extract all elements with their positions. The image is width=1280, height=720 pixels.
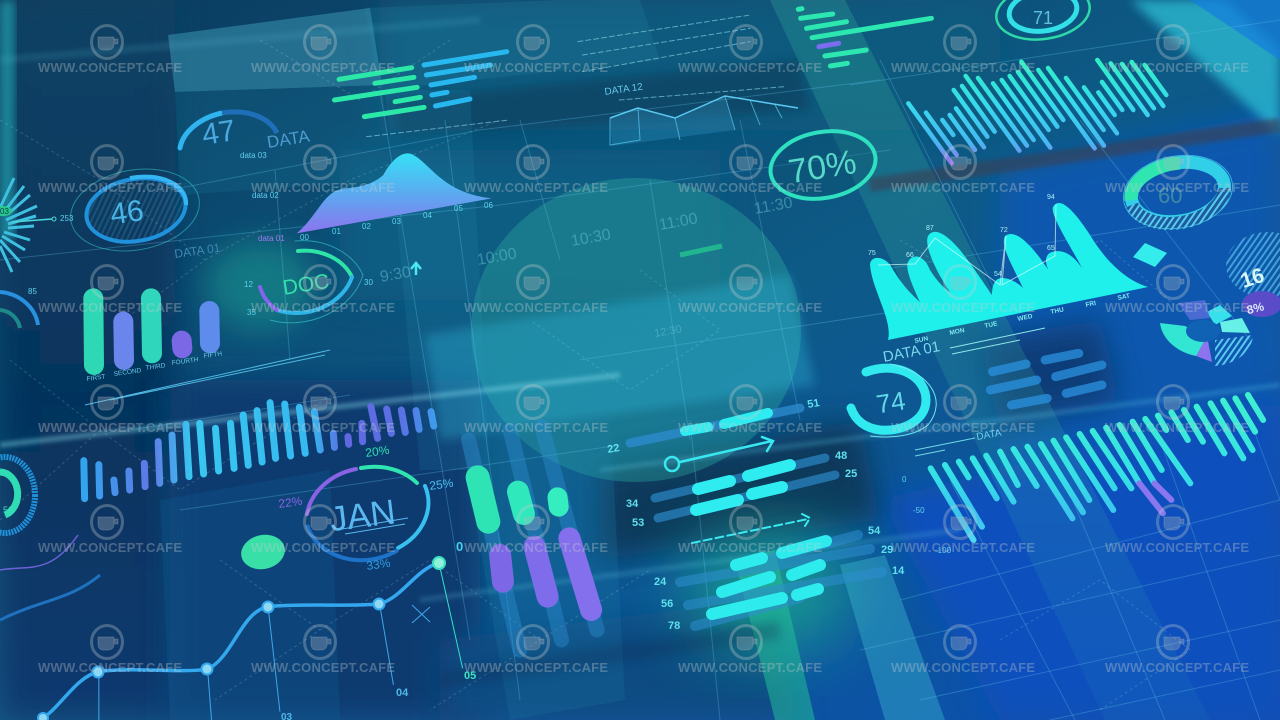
- band: top right bright: [1130, 0, 1280, 135]
- time labels: [379, 194, 794, 340]
- area chart: weekly cyan peaks: 65: [1047, 245, 1055, 252]
- circle: central: [471, 178, 801, 482]
- weekday labels: THU: [1050, 306, 1065, 316]
- bars: blue rows: [424, 52, 507, 106]
- tracks: [469, 427, 597, 650]
- time labels: 10:30: [570, 226, 612, 250]
- line chart: DATA 12: DATA 12: [604, 82, 644, 98]
- watermark: WWW.CONCEPT.CAFE: [464, 300, 608, 315]
- line chart: bottom left: 04: [396, 687, 409, 699]
- time labels: 9:30: [379, 264, 412, 286]
- watermark: WWW.CONCEPT.CAFE: [1105, 420, 1249, 435]
- watermark: WWW.CONCEPT.CAFE: [251, 540, 395, 555]
- bar labels: FOURTH: [171, 356, 199, 367]
- area chart: center left: 01: [332, 227, 341, 236]
- progress rows: group three: 29: [881, 544, 893, 556]
- watermark: WWW.CONCEPT.CAFE: [38, 300, 182, 315]
- progress rows: group three: 56: [661, 598, 673, 610]
- progress rows: group three: 54: [868, 525, 881, 537]
- area chart: weekly cyan peaks: 54: [994, 271, 1002, 278]
- watermark: WWW.CONCEPT.CAFE: [38, 180, 182, 195]
- line chart: bottom left: 05: [464, 670, 476, 682]
- area chart: center left: 03: [392, 217, 401, 226]
- watermark: WWW.CONCEPT.CAFE: [678, 180, 822, 195]
- radial gauge: 03: [0, 207, 9, 216]
- area chart: center left: data 01: [258, 234, 285, 243]
- lower right waveform: -100: [935, 546, 952, 555]
- ring: JAN: JAN: [327, 492, 398, 539]
- watermark: WWW.CONCEPT.CAFE: [891, 300, 1035, 315]
- area chart: center left: 04: [423, 211, 432, 220]
- bar: purple tails: [1139, 483, 1171, 513]
- radial gauge: [0, 178, 74, 272]
- streak: low left: [440, 630, 780, 680]
- ring: 70%: 70%: [786, 143, 859, 191]
- watermark: WWW.CONCEPT.CAFE: [678, 300, 822, 315]
- time labels: 11:30: [753, 194, 794, 218]
- ring: DOC: 12: [244, 280, 253, 289]
- bars: green rows: [334, 68, 424, 117]
- ring: JAN: 25%: [428, 476, 455, 493]
- watermark: WWW.CONCEPT.CAFE: [251, 420, 395, 435]
- area chart: weekly cyan peaks: 94: [1047, 194, 1055, 201]
- left blue trace: [0, 575, 100, 620]
- area chart: center left: 06: [484, 201, 493, 210]
- watermark: WWW.CONCEPT.CAFE: [38, 540, 182, 555]
- area chart: weekly cyan peaks: [868, 194, 1148, 366]
- ring: 60: 60: [1158, 183, 1182, 208]
- icon: up arrow: [411, 263, 421, 275]
- gauge: lower left: 85: [28, 287, 37, 296]
- band: lower green: [735, 550, 815, 720]
- watermark: WWW.CONCEPT.CAFE: [38, 420, 182, 435]
- watermark: WWW.CONCEPT.CAFE: [1105, 660, 1249, 675]
- progress rows: group two: 48: [835, 450, 847, 462]
- top right waveform: [908, 60, 1166, 163]
- progress rows: group one: 22: [606, 442, 621, 456]
- dashed guides: [367, 15, 785, 137]
- progress rows: group three: 24: [654, 576, 667, 588]
- gauge: lower left: [0, 287, 38, 328]
- watermark: WWW.CONCEPT.CAFE: [464, 660, 608, 675]
- progress rows: group two: 53: [632, 517, 644, 529]
- watermark: WWW.CONCEPT.CAFE: [891, 60, 1035, 75]
- bar labels: FIRST: [86, 373, 106, 383]
- watermark: WWW.CONCEPT.CAFE: [464, 420, 608, 435]
- left bar chart: DATA 01: [173, 241, 222, 261]
- bar labels: [86, 350, 223, 383]
- area chart: weekly cyan peaks: 87: [926, 225, 934, 232]
- weekday labels: SUN: [914, 335, 929, 345]
- progress rows: group three: 14: [892, 565, 905, 577]
- striped gauge: 16: [1238, 264, 1267, 293]
- ring: 47: DATA: [266, 126, 312, 152]
- weekday labels: MON: [949, 327, 966, 337]
- area chart: weekly cyan peaks: DATA 01: [882, 338, 942, 366]
- ring: DOC: [244, 241, 373, 323]
- weekday labels: FRI: [1085, 300, 1097, 309]
- watermark: WWW.CONCEPT.CAFE: [251, 60, 395, 75]
- bar labels: SECOND: [113, 367, 142, 378]
- area chart: weekly cyan peaks: 66: [906, 252, 914, 259]
- panel: upper center block: [365, 0, 660, 90]
- top horizontal bars: [334, 15, 785, 137]
- area chart: center left: 05: [454, 204, 463, 213]
- band: green diagonal: [770, 0, 1210, 720]
- left waveform: [84, 403, 434, 499]
- ring: JAN: 22%: [277, 494, 304, 511]
- progress rows: group two: 34: [626, 498, 639, 510]
- left line traces: [0, 535, 78, 570]
- radial gauge: 253: [60, 214, 74, 223]
- area chart: center left: 02: [362, 222, 371, 231]
- arrow: dashed: [692, 514, 810, 543]
- ring: JAN: 33%: [365, 556, 392, 573]
- watermark: WWW.CONCEPT.CAFE: [678, 660, 822, 675]
- watermark: WWW.CONCEPT.CAFE: [1105, 60, 1249, 75]
- streak: left bright: [0, 375, 620, 445]
- progress rows: group two: 25: [845, 468, 857, 480]
- purple bars: [500, 555, 503, 582]
- green dot: [238, 531, 288, 573]
- ring: DOC: 30: [364, 278, 373, 287]
- purple badge: 8%: [1245, 299, 1266, 317]
- area chart: center left: data 02: [252, 191, 279, 200]
- panel: lower left dark column: [160, 470, 340, 720]
- donut pie: [1160, 300, 1253, 366]
- ring: 47: [180, 112, 312, 152]
- watermark: WWW.CONCEPT.CAFE: [464, 60, 608, 75]
- ring: 47: 47: [200, 114, 238, 152]
- panel: upper left light panel: [168, 8, 382, 92]
- progress rows: group one: [606, 397, 821, 471]
- area chart: center left: [240, 151, 493, 243]
- area chart: center left: 00: [300, 233, 309, 242]
- bar: purple: [819, 43, 839, 47]
- lower right waveform: DATA: [976, 428, 1003, 443]
- blue pill rows: [990, 353, 1102, 405]
- band: lower left column: [460, 410, 625, 720]
- lower right waveform: [902, 395, 1263, 555]
- ring: JAN: [277, 443, 455, 573]
- watermark: WWW.CONCEPT.CAFE: [251, 300, 395, 315]
- streak: lower: [420, 530, 960, 600]
- lower right waveform: 0: [902, 475, 907, 484]
- watermark: WWW.CONCEPT.CAFE: [1105, 180, 1249, 195]
- ring: 70%: [765, 123, 881, 207]
- watermark: WWW.CONCEPT.CAFE: [38, 60, 182, 75]
- bar labels: THIRD: [145, 362, 166, 372]
- area chart: weekly cyan peaks: 72: [1000, 227, 1008, 234]
- streak: center: [600, 385, 1280, 470]
- progress rows: group three: [654, 525, 905, 632]
- watermark: WWW.CONCEPT.CAFE: [38, 660, 182, 675]
- ring: 74: [851, 364, 936, 437]
- streak: right dark: [870, 125, 1280, 185]
- paired vertical bars: 0: [456, 539, 463, 554]
- line chart: bottom left: [38, 557, 476, 720]
- icon: cyan diamond: [1133, 243, 1167, 267]
- arrow: solid: [665, 437, 773, 471]
- lower right waveform: -50: [913, 506, 925, 515]
- ring: 74: 74: [874, 385, 907, 419]
- ring: 56: 56: [3, 505, 13, 515]
- small green gauge bar: [680, 246, 722, 255]
- watermark: WWW.CONCEPT.CAFE: [678, 540, 822, 555]
- left bar chart: [85, 241, 330, 405]
- weekday labels: TUE: [984, 320, 999, 330]
- area chart: weekly cyan peaks: 75: [868, 250, 876, 257]
- watermark: WWW.CONCEPT.CAFE: [891, 180, 1035, 195]
- green bars: [478, 477, 488, 522]
- purple badge: [1242, 291, 1280, 317]
- ring: JAN: 20%: [364, 443, 391, 460]
- panel: central light rectangle: [425, 275, 815, 440]
- band: lower teal: [840, 555, 945, 720]
- panel: light column: [385, 90, 490, 470]
- watermark: WWW.CONCEPT.CAFE: [464, 540, 608, 555]
- panel: upper left lower extension: [175, 85, 395, 195]
- panel: top right blue: [1190, 0, 1280, 60]
- time labels: 11:00: [658, 210, 699, 234]
- progress rows: group three: 78: [668, 620, 680, 632]
- weekday labels: SAT: [1117, 293, 1131, 302]
- ring: DOC: DOC: [281, 270, 331, 300]
- weekday labels: WED: [1017, 313, 1034, 323]
- watermark: WWW.CONCEPT.CAFE: [251, 180, 395, 195]
- ring: 71: [993, 0, 1093, 45]
- watermark: WWW.CONCEPT.CAFE: [464, 180, 608, 195]
- ring: DOC: 35: [247, 308, 256, 317]
- progress rows: group two: [626, 450, 857, 543]
- ring: 71: 71: [1033, 8, 1053, 28]
- watermark: WWW.CONCEPT.CAFE: [891, 420, 1035, 435]
- progress rows: group one: 51: [806, 397, 821, 411]
- top right rows: [798, 9, 931, 66]
- weekday labels: [914, 293, 1131, 345]
- time labels: 12:30: [653, 323, 683, 340]
- watermark: WWW.CONCEPT.CAFE: [678, 420, 822, 435]
- ring: 46: [64, 159, 206, 261]
- time labels: 10:00: [476, 245, 518, 269]
- streak: top: [0, 20, 480, 60]
- paired vertical bars: [456, 427, 597, 650]
- ring: 46: 46: [108, 194, 146, 231]
- watermark: WWW.CONCEPT.CAFE: [678, 60, 822, 75]
- watermark: WWW.CONCEPT.CAFE: [251, 660, 395, 675]
- line chart: DATA 12: [604, 82, 798, 146]
- area chart: center left: data 03: [240, 151, 267, 160]
- striped gauge: [1226, 232, 1280, 298]
- ring: 60: [1118, 147, 1238, 237]
- watermark: WWW.CONCEPT.CAFE: [1105, 300, 1249, 315]
- watermark: WWW.CONCEPT.CAFE: [891, 660, 1035, 675]
- bar labels: FIFTH: [203, 350, 223, 360]
- ring: 56: [0, 457, 35, 533]
- watermark: WWW.CONCEPT.CAFE: [1105, 540, 1249, 555]
- watermark: WWW.CONCEPT.CAFE: [891, 540, 1035, 555]
